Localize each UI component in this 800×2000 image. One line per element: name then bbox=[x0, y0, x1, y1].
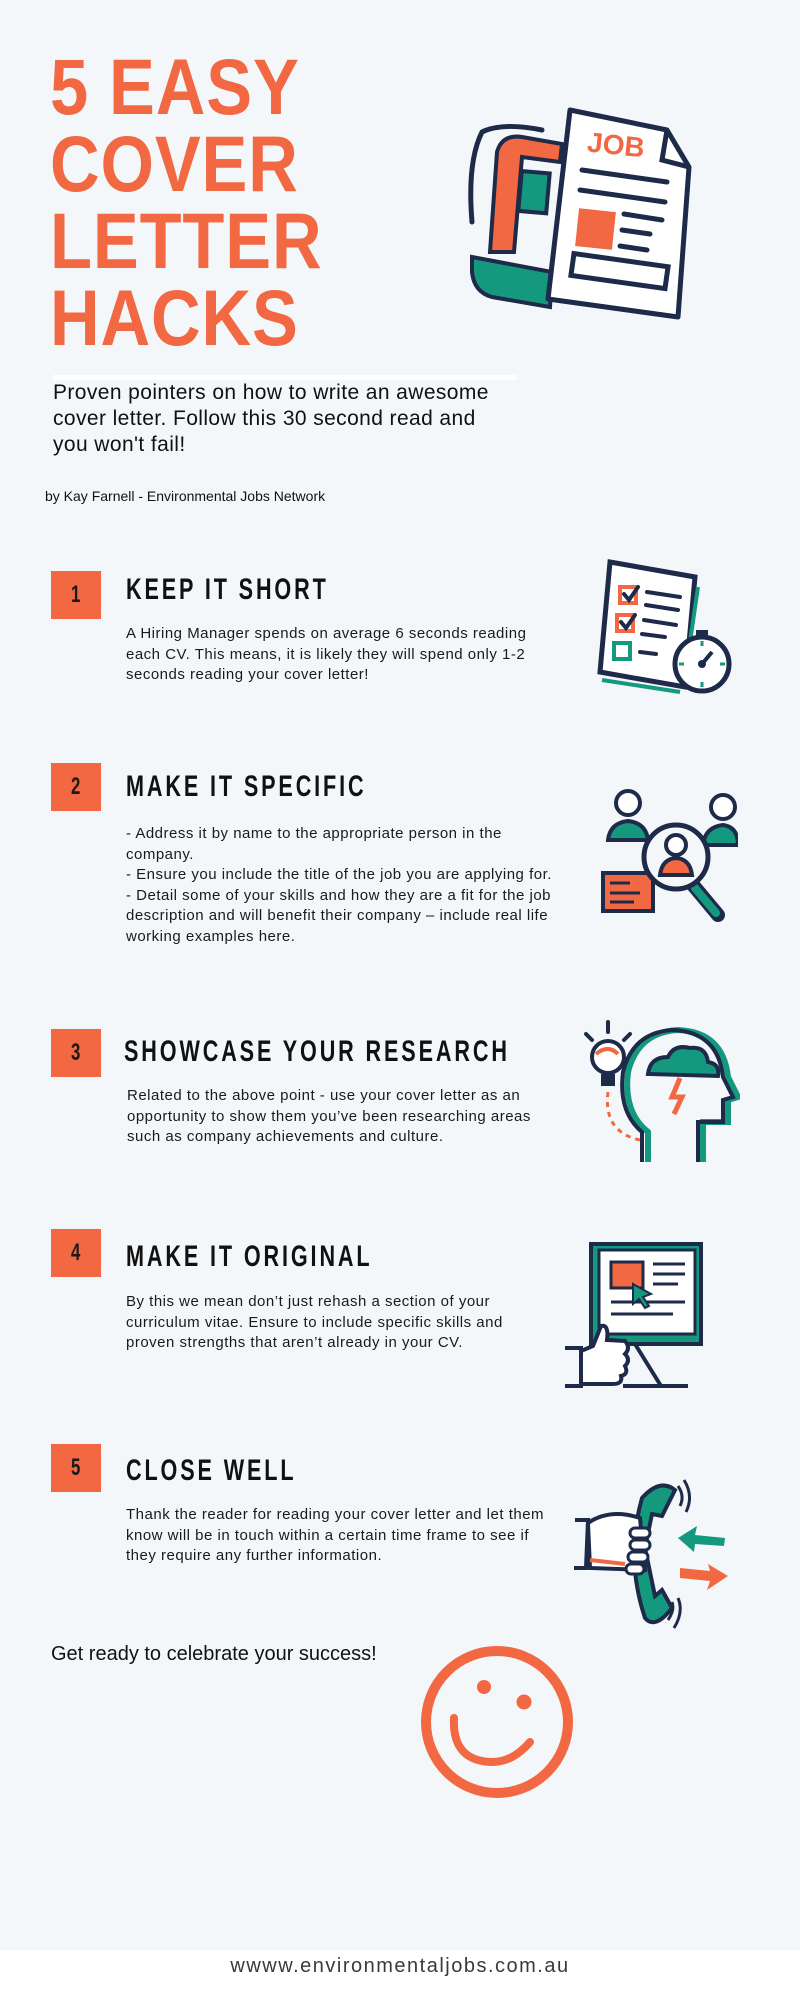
closing line: Get ready to celebrate your success! bbox=[51, 1643, 377, 1665]
number box 5 bbox=[51, 1444, 101, 1492]
body 2: - Detail some of your skills and how they are a fit for the job bbox=[126, 886, 551, 904]
number box 3: 3 bbox=[71, 1039, 81, 1066]
section 1 bbox=[51, 559, 732, 694]
body 4: curriculum vitae. Ensure to include specific skills and bbox=[126, 1314, 503, 1330]
footer bbox=[0, 1950, 800, 2000]
body 5 bbox=[126, 1506, 544, 1564]
subtitle bbox=[53, 381, 489, 456]
section 4 bbox=[51, 1229, 703, 1388]
body 3: such as company achievements and culture. bbox=[127, 1128, 444, 1145]
body 3: opportunity to show them you’ve been researching areas bbox=[127, 1108, 531, 1124]
body 2: company. bbox=[126, 846, 194, 862]
icon: smiley bbox=[421, 1646, 573, 1798]
body 2: - Address it by name to the appropriate person in the bbox=[126, 825, 502, 842]
subtitle: Proven pointers on how to write an awesome bbox=[53, 381, 489, 404]
body 1: each CV. This means, it is likely they will spend only 1-2 bbox=[126, 646, 525, 662]
body 3 bbox=[127, 1087, 531, 1145]
number box 3 bbox=[51, 1029, 101, 1077]
body 2: - Ensure you include the title of the job you are applying for. bbox=[126, 866, 552, 883]
body 2: description and will benefit their company – include real life bbox=[126, 907, 548, 924]
subtitle: cover letter. Follow this 30 second read and bbox=[53, 407, 476, 430]
body 2: working examples here. bbox=[126, 928, 295, 944]
heading 3: SHOWCASE YOUR RESEARCH bbox=[124, 1035, 510, 1068]
byline: by Kay Farnell - Environmental Jobs Network bbox=[45, 488, 325, 504]
icon: job newspaper: JOB bbox=[586, 126, 646, 163]
divider line bbox=[53, 375, 516, 380]
body 4: By this we mean don’t just rehash a section of your bbox=[126, 1293, 490, 1310]
icon: job newspaper bbox=[468, 108, 692, 320]
title: COVER bbox=[50, 119, 299, 208]
icon: people search bbox=[601, 789, 738, 922]
subtitle: you won't fail! bbox=[53, 433, 186, 456]
number box 2 bbox=[51, 763, 101, 811]
body 5: know will be in touch within a certain time frame to see if bbox=[126, 1526, 529, 1544]
body 5: Thank the reader for reading your cover letter and let them bbox=[126, 1506, 544, 1523]
section 3 bbox=[51, 1020, 740, 1162]
footer url: wwww.environmentaljobs.com.au bbox=[230, 1955, 570, 1977]
body 2 bbox=[126, 825, 552, 944]
number box 2: 2 bbox=[71, 773, 81, 800]
number box 4: 4 bbox=[71, 1239, 81, 1266]
icon: head with lightbulb and cloud bbox=[584, 1020, 740, 1162]
section 2 bbox=[51, 763, 738, 944]
body 1: seconds reading your cover letter! bbox=[126, 666, 369, 683]
heading 2: MAKE IT SPECIFIC bbox=[126, 770, 366, 803]
title: LETTER bbox=[50, 196, 323, 285]
number box 4 bbox=[51, 1229, 101, 1277]
title bbox=[50, 42, 323, 362]
title: 5 EASY bbox=[50, 42, 300, 131]
title: HACKS bbox=[50, 273, 299, 362]
heading 1: KEEP IT SHORT bbox=[126, 573, 329, 606]
body 1 bbox=[126, 625, 526, 683]
number box 5: 5 bbox=[71, 1454, 81, 1481]
number box 1 bbox=[51, 571, 101, 619]
body 1: A Hiring Manager spends on average 6 seconds reading bbox=[126, 625, 526, 642]
icon: checklist with stopwatch bbox=[597, 559, 732, 694]
section 5 bbox=[51, 1444, 728, 1629]
heading 4: MAKE IT ORIGINAL bbox=[126, 1240, 372, 1273]
number box 1: 1 bbox=[71, 581, 81, 608]
heading 5: CLOSE WELL bbox=[126, 1454, 296, 1487]
body 4 bbox=[126, 1293, 503, 1351]
body 3: Related to the above point - use your cover letter as an bbox=[127, 1087, 520, 1104]
icon: monitor with thumbs up bbox=[565, 1242, 703, 1388]
icon: phone in hand with arrows bbox=[574, 1479, 728, 1629]
body 4: proven strengths that aren’t already in your CV. bbox=[126, 1334, 463, 1351]
body 5: they require any further information. bbox=[126, 1547, 382, 1564]
